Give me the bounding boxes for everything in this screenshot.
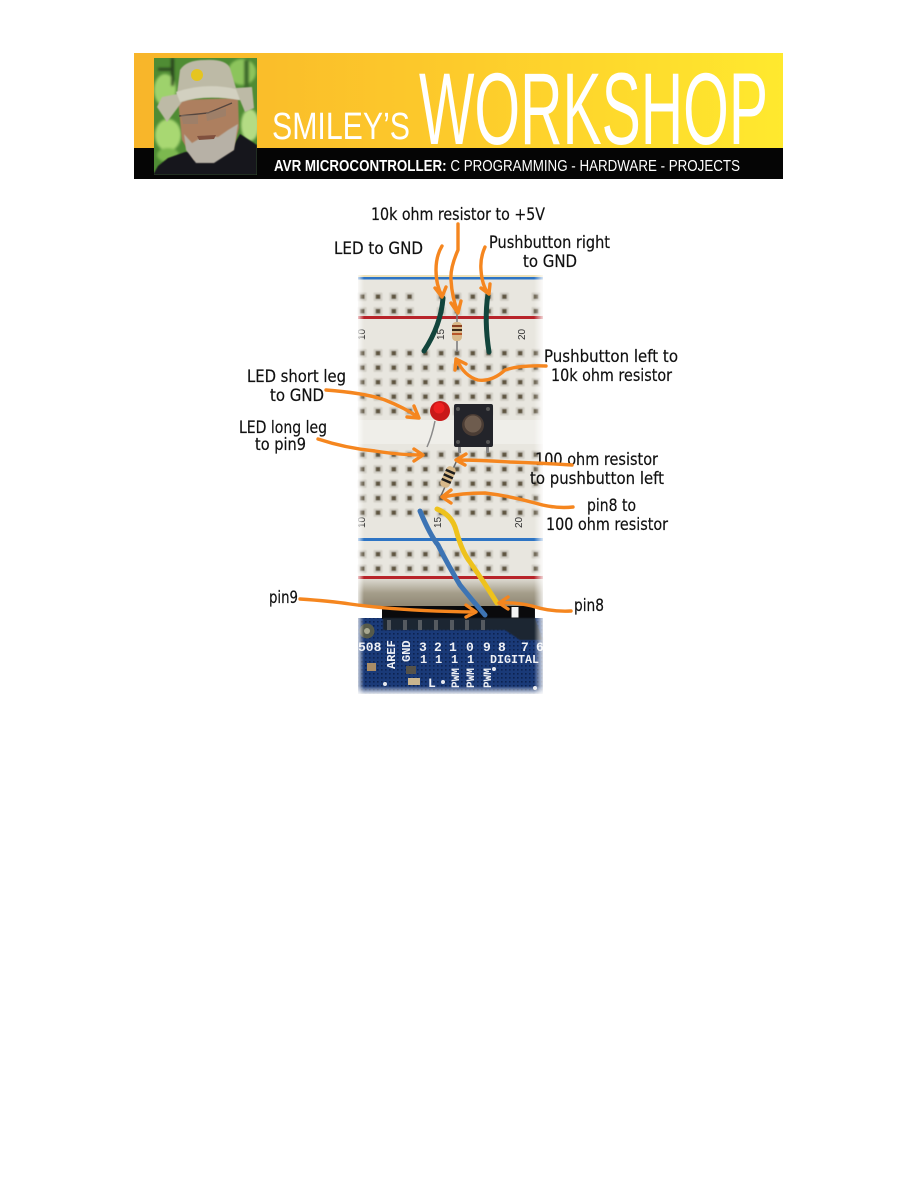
label: Pushbutton left to 10k ohm resistor: Pushbutton left to	[544, 347, 678, 366]
label: pin9: pin9	[269, 588, 298, 607]
arrow: pin8	[499, 597, 571, 611]
row numbers on breadboard: 10	[357, 516, 368, 528]
label: LED to GND: LED to GND	[334, 239, 423, 258]
label: LED short leg to GND: LED short leg	[247, 367, 346, 386]
row numbers on breadboard: 20	[514, 516, 525, 528]
arrow: 100 ohm resistor	[456, 454, 572, 465]
label: pin8 to 100 ohm resistor: 100 ohm resistor	[546, 515, 668, 534]
Arduino pin labels: 6	[536, 640, 544, 655]
row numbers on breadboard: 15	[433, 516, 444, 528]
label: Pushbutton right to GND: Pushbutton right	[489, 233, 610, 252]
label: pin8: pin8	[574, 596, 604, 615]
Arduino pin labels: 2	[434, 640, 442, 655]
arrow: LED to GND	[435, 246, 446, 297]
row numbers on breadboard: 20	[517, 328, 528, 340]
pushbutton	[454, 404, 493, 453]
arrow: LED short leg	[326, 390, 419, 418]
arrow: pin9	[300, 599, 476, 617]
label: LED long leg to pin9: LED long leg	[239, 418, 327, 437]
edge fade of photo	[356, 272, 546, 696]
label: Pushbutton left to 10k ohm resistor: 10k ohm resistor	[551, 366, 672, 385]
label: LED short leg to GND: to GND	[270, 386, 324, 405]
arrow: pin8 to resistor	[442, 490, 573, 508]
Arduino pin labels: 0	[466, 640, 474, 655]
label: LED short leg to GND	[247, 367, 346, 405]
label: pin8 to 100 ohm resistor: pin8 to	[587, 496, 636, 515]
Arduino pin labels: 9	[483, 640, 491, 655]
row numbers on breadboard: 15	[436, 328, 447, 340]
Arduino pin labels: AREF	[385, 640, 399, 669]
banner tagline: AVR MICROCONTROLLER: C PROGRAMMING - HARDWARE - PROJECTS	[274, 158, 740, 175]
arrow: 10k resistor to +5V	[451, 224, 461, 313]
100 ohm resistor	[439, 460, 457, 498]
label: 100 ohm resistor to pushbutton left	[530, 450, 664, 488]
green jumper wires	[424, 294, 489, 352]
Arduino pin labels	[358, 640, 544, 691]
banner title: SMILEY'S: SMILEY’S	[272, 106, 410, 148]
row numbers on breadboard: 10	[357, 328, 368, 340]
label: 10k ohm resistor to +5V: 10k ohm resistor to +5V	[371, 205, 546, 224]
label: Pushbutton right to GND	[489, 233, 610, 271]
Arduino pin labels: DIGITAL	[490, 653, 539, 667]
Arduino pin labels: 1	[449, 640, 457, 655]
10k ohm resistor	[452, 312, 462, 352]
Arduino pin labels: 8	[498, 640, 506, 655]
Arduino pin labels: 1	[420, 653, 427, 667]
red LED	[427, 401, 450, 447]
blue wire	[420, 511, 485, 615]
label: 100 ohm resistor to pushbutton left: to pushbutton left	[530, 469, 664, 488]
Arduino pin labels: 1	[467, 653, 474, 667]
label: LED long leg to pin9	[239, 418, 327, 454]
Arduino pin labels: GND	[400, 640, 414, 662]
Arduino pin labels: PWM	[451, 668, 463, 688]
Arduino pin labels: PWM	[483, 668, 495, 688]
breadboard photo	[354, 275, 544, 607]
label: 100 ohm resistor to pushbutton left: 100 ohm resistor	[535, 450, 658, 469]
Arduino board	[358, 606, 544, 694]
Arduino pin labels: L	[428, 676, 436, 691]
Arduino pin labels: PWM	[466, 668, 478, 688]
label: LED long leg to pin9: to pin9	[255, 435, 306, 454]
label: pin8 to 100 ohm resistor	[546, 496, 668, 534]
Arduino pin labels: 7	[521, 640, 529, 655]
Arduino pin labels: 1	[451, 653, 458, 667]
banner photo: man in hat	[153, 58, 259, 175]
arrow: pushbutton right to GND	[481, 247, 490, 294]
Arduino pin labels: 3	[419, 640, 427, 655]
yellow wire	[437, 509, 497, 603]
Arduino pin labels: 508	[358, 640, 382, 655]
arrow: pushbutton left to resistor	[455, 359, 546, 380]
Arduino pin labels: 1	[435, 653, 442, 667]
banner: Smiley's Workshop	[134, 52, 783, 179]
arrow: LED long leg	[318, 439, 423, 461]
label: Pushbutton right to GND: to GND	[523, 252, 577, 271]
label: Pushbutton left to 10k ohm resistor	[544, 347, 678, 385]
row numbers on breadboard	[357, 328, 528, 528]
